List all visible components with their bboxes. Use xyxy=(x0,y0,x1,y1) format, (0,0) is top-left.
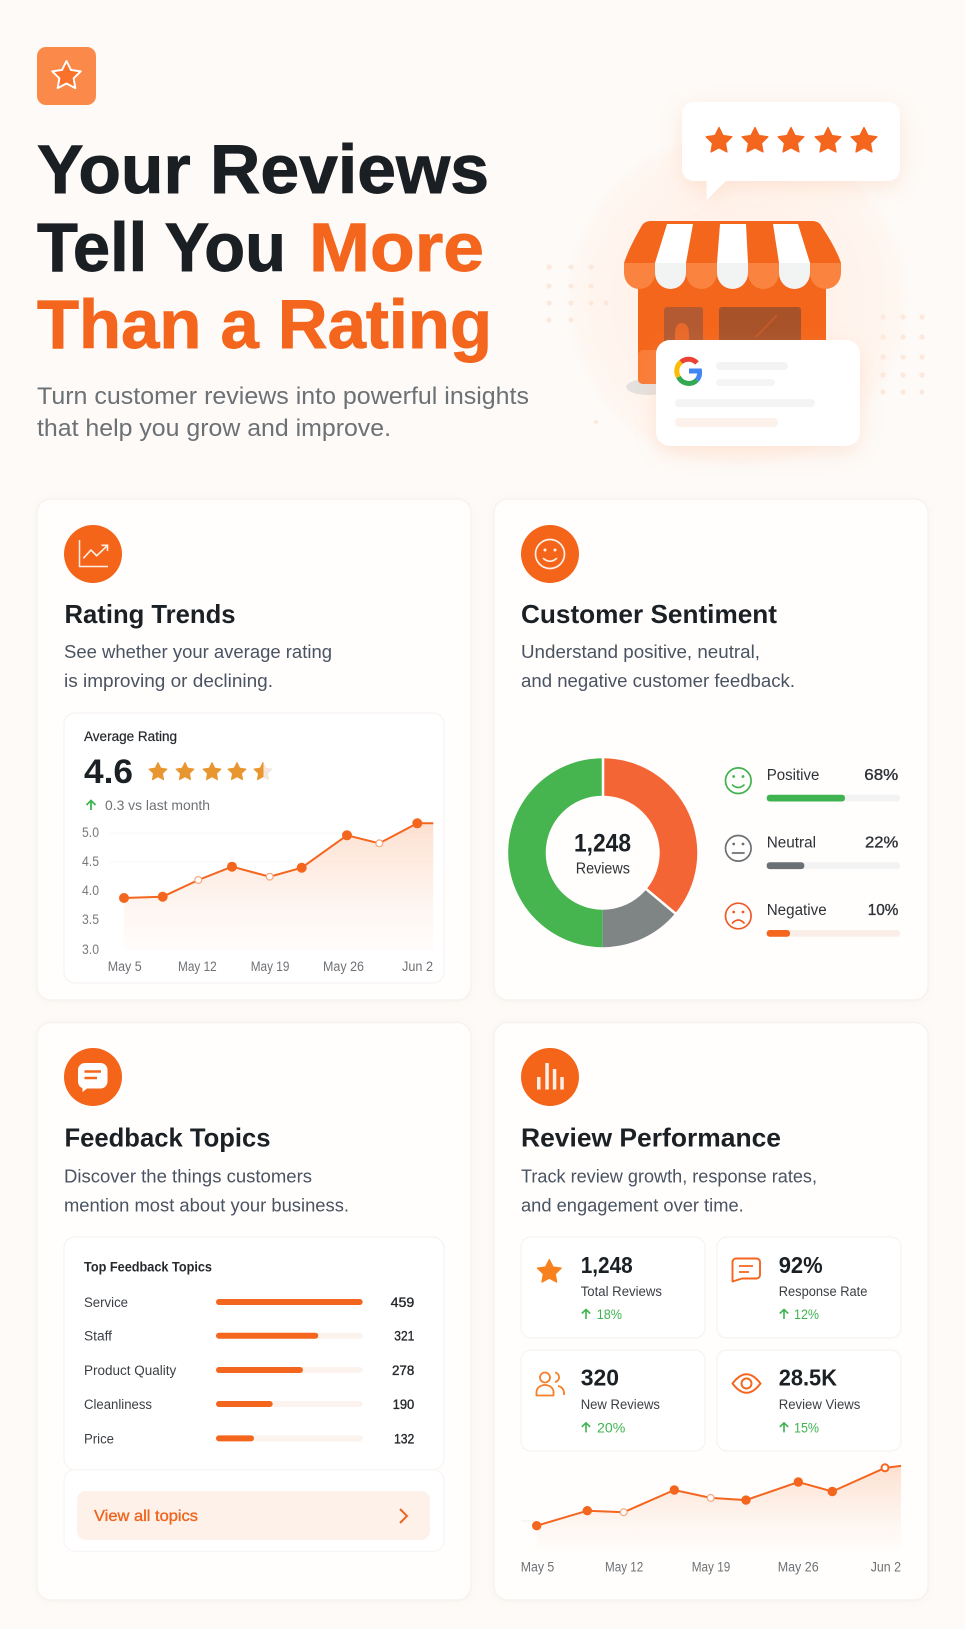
performance line chart: May 26 xyxy=(778,1559,819,1574)
view all topics button xyxy=(64,1470,444,1551)
stat: total reviews: Total Reviews xyxy=(581,1284,662,1299)
subtitle xyxy=(37,383,529,442)
stat: new reviews: 20% xyxy=(597,1419,625,1435)
icon: chat bubble xyxy=(64,1048,122,1106)
view all topics button: View all topics xyxy=(94,1508,198,1525)
stat: total reviews: 18% xyxy=(597,1306,622,1322)
icon: smile xyxy=(521,525,579,583)
topic: cleanliness: 190 xyxy=(393,1397,414,1412)
topic: product quality xyxy=(84,1363,414,1378)
description: Discover the things customers xyxy=(64,1166,312,1186)
topic: service xyxy=(84,1295,414,1310)
description: Understand positive, neutral, xyxy=(521,642,760,662)
title: Your Reviews xyxy=(37,131,489,208)
topic: staff: Staff xyxy=(84,1329,112,1344)
topic: cleanliness xyxy=(84,1397,414,1412)
ground shadow xyxy=(626,379,670,395)
heading: Feedback Topics xyxy=(64,1123,270,1153)
subtitle: Turn customer reviews into powerful insights xyxy=(37,383,529,410)
line chart: Jun 2 xyxy=(402,959,433,974)
title xyxy=(37,131,492,363)
panel: customer sentiment xyxy=(494,499,928,1000)
legend: positive xyxy=(726,767,900,802)
topic: staff xyxy=(84,1329,414,1344)
stat: response rate: 12% xyxy=(794,1306,819,1322)
title: Tell You xyxy=(37,209,286,286)
line chart: May 12 xyxy=(178,959,217,974)
description: is improving or declining. xyxy=(64,671,273,691)
topic: service: 459 xyxy=(391,1295,414,1310)
stat: review views xyxy=(717,1350,901,1451)
heading: Customer Sentiment xyxy=(521,599,777,629)
donut chart: Reviews xyxy=(576,860,630,877)
panel: review performance xyxy=(494,1022,928,1600)
title: Than a Rating xyxy=(37,286,492,363)
icon: Google G xyxy=(677,359,700,383)
topic: cleanliness: Cleanliness xyxy=(84,1397,152,1412)
chart panel: average rating xyxy=(64,713,444,983)
topic: price: 132 xyxy=(394,1431,414,1446)
legend: neutral: Neutral xyxy=(767,835,816,852)
description xyxy=(521,1166,817,1216)
stat: total reviews: 1,248 xyxy=(581,1252,633,1278)
stat: new reviews: New Reviews xyxy=(581,1397,660,1412)
description: and negative customer feedback. xyxy=(521,671,795,691)
logo badge: star xyxy=(37,47,96,105)
stat: response rate xyxy=(717,1237,901,1338)
description: and engagement over time. xyxy=(521,1196,744,1216)
speech bubble with stars xyxy=(682,102,900,200)
topic: price xyxy=(84,1431,414,1446)
illustration: storefront with reviews xyxy=(546,102,925,466)
legend: negative xyxy=(726,902,900,937)
rating value: 4.6 xyxy=(84,753,133,791)
line chart: 3.0 xyxy=(82,942,99,957)
line chart: 4.5 xyxy=(82,854,99,869)
legend: negative: Negative xyxy=(767,902,827,919)
dot pattern right xyxy=(880,314,925,395)
line chart: May 26 xyxy=(323,959,364,974)
subtitle: that help you grow and improve. xyxy=(37,415,391,442)
panel: feedback topics xyxy=(37,1022,471,1600)
rating stars xyxy=(149,762,272,780)
panel heading: Top Feedback Topics xyxy=(84,1260,212,1275)
description: See whether your average rating xyxy=(64,642,332,662)
line chart xyxy=(82,818,433,974)
background blob xyxy=(572,134,904,466)
stat: response rate: Response Rate xyxy=(779,1284,867,1299)
description xyxy=(64,642,332,691)
legend: negative: 10% xyxy=(868,902,899,919)
store xyxy=(624,221,841,384)
performance line chart xyxy=(521,1464,901,1574)
topic: product quality: Product Quality xyxy=(84,1363,177,1378)
stat: total reviews xyxy=(521,1237,705,1338)
donut chart: 1,248 xyxy=(574,830,631,858)
legend: positive: 68% xyxy=(864,767,899,784)
stat: new reviews: 320 xyxy=(581,1365,619,1391)
performance line chart: May 5 xyxy=(521,1559,554,1574)
heading: Review Performance xyxy=(521,1123,781,1153)
description: mention most about your business. xyxy=(64,1196,349,1216)
icon: trend chart xyxy=(64,525,122,583)
stat: review views: 15% xyxy=(794,1419,819,1435)
stat: new reviews xyxy=(521,1350,705,1451)
donut chart xyxy=(508,757,697,947)
description: Track review growth, response rates, xyxy=(521,1166,817,1186)
topic: staff: 321 xyxy=(394,1329,414,1344)
line chart: 3.5 xyxy=(82,912,99,927)
description xyxy=(521,642,795,691)
change versus last month: 0.3 vs last month xyxy=(105,797,210,813)
legend: neutral: 22% xyxy=(865,835,899,852)
line chart: May 19 xyxy=(251,959,289,974)
stat: review views: 28.5K xyxy=(779,1365,837,1391)
title: More xyxy=(309,209,484,286)
performance line chart: May 12 xyxy=(605,1559,643,1574)
heading: Rating Trends xyxy=(64,599,236,629)
line chart: May 5 xyxy=(108,959,142,974)
performance line chart: Jun 2 xyxy=(871,1559,901,1574)
line chart: 5.0 xyxy=(82,825,99,840)
description xyxy=(64,1166,349,1216)
stat: review views: Review Views xyxy=(779,1397,861,1412)
stat: response rate: 92% xyxy=(779,1252,823,1278)
panel: rating trends xyxy=(37,499,471,1000)
line chart: 4.0 xyxy=(82,883,99,898)
performance line chart: May 19 xyxy=(692,1559,730,1574)
legend: neutral xyxy=(726,835,900,869)
label: Average Rating xyxy=(84,729,177,744)
top feedback topics panel xyxy=(64,1237,444,1470)
dot pattern left xyxy=(546,264,609,424)
legend: positive: Positive xyxy=(767,767,819,784)
topic: product quality: 278 xyxy=(392,1363,414,1378)
topic: price: Price xyxy=(84,1431,114,1446)
Google review card xyxy=(656,340,860,446)
topic: service: Service xyxy=(84,1295,128,1310)
icon: bar chart xyxy=(521,1048,579,1106)
